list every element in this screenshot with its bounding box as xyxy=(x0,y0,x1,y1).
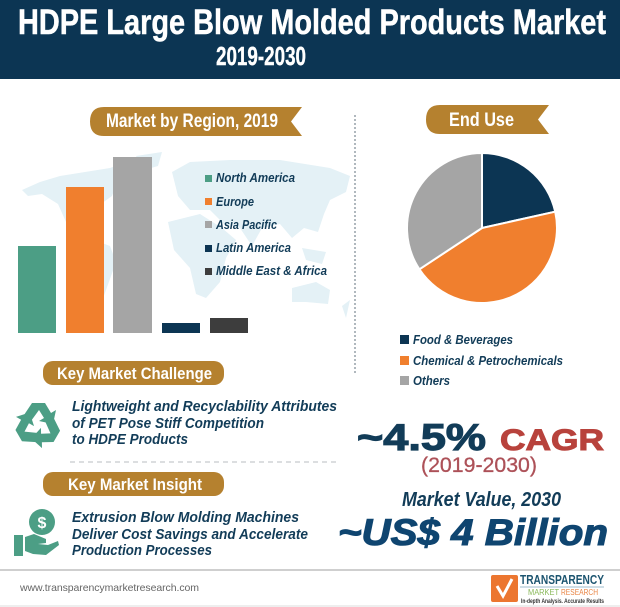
logo: Transparency Market Research xyxy=(491,573,605,605)
legend: regions: Middle East & Africa xyxy=(216,263,327,278)
legend: regions xyxy=(205,170,327,278)
pill: Key Market Challenge: Key Market Challenge xyxy=(57,364,212,383)
stat: market value: ~US$ 4 Billion xyxy=(338,512,608,553)
text block: key market insight: Production Processes xyxy=(72,543,212,559)
pie chart: end use xyxy=(407,153,557,303)
divider xyxy=(354,115,356,375)
logo: Transparency Market Research: RESEARCH xyxy=(561,588,598,597)
text block: key market insight: Extrusion Blow Molding Machines xyxy=(72,510,299,526)
text block: key market challenge: of PET Pose Stiff Competition xyxy=(72,416,264,432)
text block: key market challenge: Lightweight and Recyclability Attributes xyxy=(72,399,337,415)
text block: key market insight xyxy=(72,510,308,559)
banner: End Use xyxy=(426,105,549,134)
stat: CAGR: (2019-2030) xyxy=(421,454,537,477)
stat: CAGR: CAGR xyxy=(500,424,604,457)
banner: End Use: End Use xyxy=(449,110,514,131)
icon: hand holding dollar coin: $ xyxy=(38,515,47,532)
header: title band xyxy=(0,0,620,79)
logo: Transparency Market Research: MARKET xyxy=(528,588,559,597)
icon: recycling arrows xyxy=(10,403,64,452)
icon: hand holding dollar coin xyxy=(14,509,59,556)
text block: key market challenge: to HDPE Products xyxy=(72,432,188,448)
text block: key market insight: Deliver Cost Savings and Accelerate xyxy=(72,527,308,543)
legend: regions: North America xyxy=(216,170,295,185)
header: title band: 2019-2030 xyxy=(216,41,306,71)
world map background xyxy=(22,152,350,318)
legend: regions: Latin America xyxy=(216,240,291,255)
banner: Market by Region, 2019: Market by Region, 2019 xyxy=(106,111,278,132)
stat: market value xyxy=(338,489,608,553)
stat: CAGR: ~4.5% xyxy=(357,417,486,458)
stat: market value: Market Value, 2030 xyxy=(402,489,561,511)
legend: regions: Asia Pacific xyxy=(215,217,278,232)
legend: end use xyxy=(400,332,563,388)
pill: Key Market Insight: Key Market Insight xyxy=(68,475,202,494)
banner: Market by Region, 2019 xyxy=(90,107,302,136)
stat: CAGR xyxy=(357,417,604,477)
legend: end use: Others xyxy=(413,373,450,388)
legend: regions: Europe xyxy=(216,194,254,209)
text block: key market challenge xyxy=(72,399,337,448)
bar chart: market by region xyxy=(18,157,248,333)
pill: Key Market Insight xyxy=(43,472,224,496)
legend: end use: Food & Beverages xyxy=(413,332,513,347)
footer url: www.transparencymarketresearch.com xyxy=(19,582,199,594)
legend: end use: Chemical & Petrochemicals xyxy=(413,353,563,368)
